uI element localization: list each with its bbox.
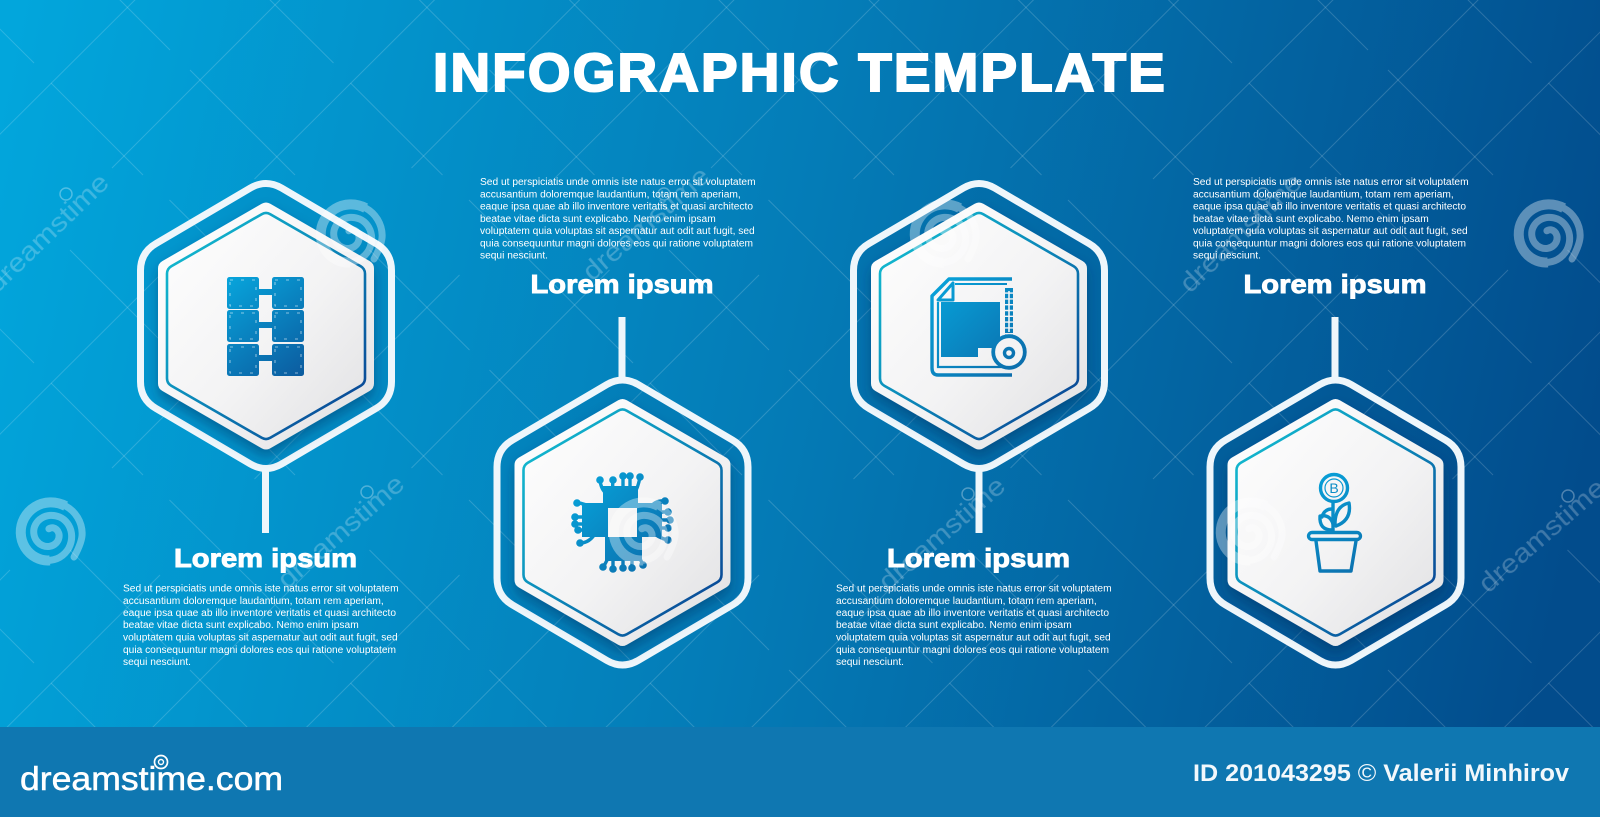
text block: sequi nesciunt. [836,657,904,668]
icon: bitcoin plant in pot: B [1329,480,1339,496]
text block: voluptatem quia voluptas sit aspernatur aut odit aut fugit, sed [1193,226,1468,237]
icon: document with key [932,279,1025,375]
watermark spirals [21,204,1580,560]
text block: quia consequuntur magni dolores eos qui ratione voluptatem [836,645,1109,656]
text block: voluptatem quia voluptas sit aspernatur aut odit aut fugit, sed [480,226,755,237]
text block: Sed ut perspiciatis unde omnis iste natus error sit voluptatem [836,584,1112,594]
icon: server blocks [227,277,304,376]
text block: Sed ut perspiciatis unde omnis iste natus error sit voluptatem [1193,177,1469,188]
icon: processor circuit [571,472,674,573]
text block: voluptatem quia voluptas sit aspernatur aut odit aut fugit, sed [836,632,1111,643]
text block [1193,177,1469,262]
watermark texts: dreamstime [576,160,715,287]
text block: accusantium doloremque laudantium, totam rem aperiam, [1193,190,1454,200]
watermark texts: dreamstime [1173,167,1308,298]
text block: eaque ipsa quae ab illo inventore veritatis et quasi architecto [836,608,1109,619]
panel: step 4 [1193,177,1469,665]
watermark small swirls [60,188,1574,502]
heading: Lorem ipsum [1244,269,1426,299]
watermark texts: dreamstime [271,468,410,595]
heading: Lorem ipsum [174,543,357,573]
footer band [0,727,1600,817]
icon: bitcoin plant in pot [1308,474,1360,571]
text block: quia consequuntur magni dolores eos qui ratione voluptatem [1193,238,1466,250]
watermark texts: dreamstime [872,470,1011,597]
connector line [976,468,982,533]
panel: step 2 [480,177,756,665]
text block [123,584,399,668]
panel: step 1 [123,184,399,668]
text block: eaque ipsa quae ab illo inventore veritatis et quasi architecto [1193,202,1466,213]
text block [836,584,1112,668]
text block: Sed ut perspiciatis unde omnis iste natus error sit voluptatem [123,584,399,594]
watermark texts [0,160,1600,599]
hexagon frame [1210,380,1461,665]
heading: Lorem ipsum [530,269,714,299]
connector line [1332,317,1338,381]
connector line [262,468,269,533]
footer credit: ID 201043295 © Valerii Minhirov [1193,760,1570,787]
text block: accusantium doloremque laudantium, totam rem aperiam, [123,596,384,607]
heading: Lorem ipsum [887,543,1070,573]
text block: beatae vitae dicta sunt explicabo. Nemo enim ipsam [480,214,716,225]
text block: accusantium doloremque laudantium, totam rem aperiam, [836,596,1097,607]
footer logo: dreamstime.com [20,760,283,797]
text block: sequi nesciunt. [480,251,548,262]
watermark overlay [0,160,1600,599]
connector line [618,317,626,381]
text block: eaque ipsa quae ab illo inventore veritatis et quasi architecto [123,608,396,619]
text block: quia consequuntur magni dolores eos qui ratione voluptatem [123,645,396,656]
text block: accusantium doloremque laudantium, totam rem aperiam, [480,190,741,200]
text block: beatae vitae dicta sunt explicabo. Nemo enim ipsam [1193,214,1429,225]
text block: voluptatem quia voluptas sit aspernatur aut odit aut fugit, sed [123,632,398,643]
text block: beatae vitae dicta sunt explicabo. Nemo enim ipsam [836,620,1072,631]
watermark texts: dreamstime [1472,472,1600,599]
text block: sequi nesciunt. [123,657,191,668]
text block: sequi nesciunt. [1193,251,1261,262]
hexagon frame [140,184,392,468]
text block: eaque ipsa quae ab illo inventore veritatis et quasi architecto [480,202,753,213]
hexagon frame [497,380,748,665]
hexagon frame [854,184,1104,468]
text block: Sed ut perspiciatis unde omnis iste natus error sit voluptatem [480,177,756,188]
panel: step 3 [836,184,1112,668]
title: INFOGRAPHIC TEMPLATE [433,43,1167,103]
text block: beatae vitae dicta sunt explicabo. Nemo enim ipsam [123,620,359,631]
text block [480,177,756,262]
text block: quia consequuntur magni dolores eos qui ratione voluptatem [480,238,753,250]
